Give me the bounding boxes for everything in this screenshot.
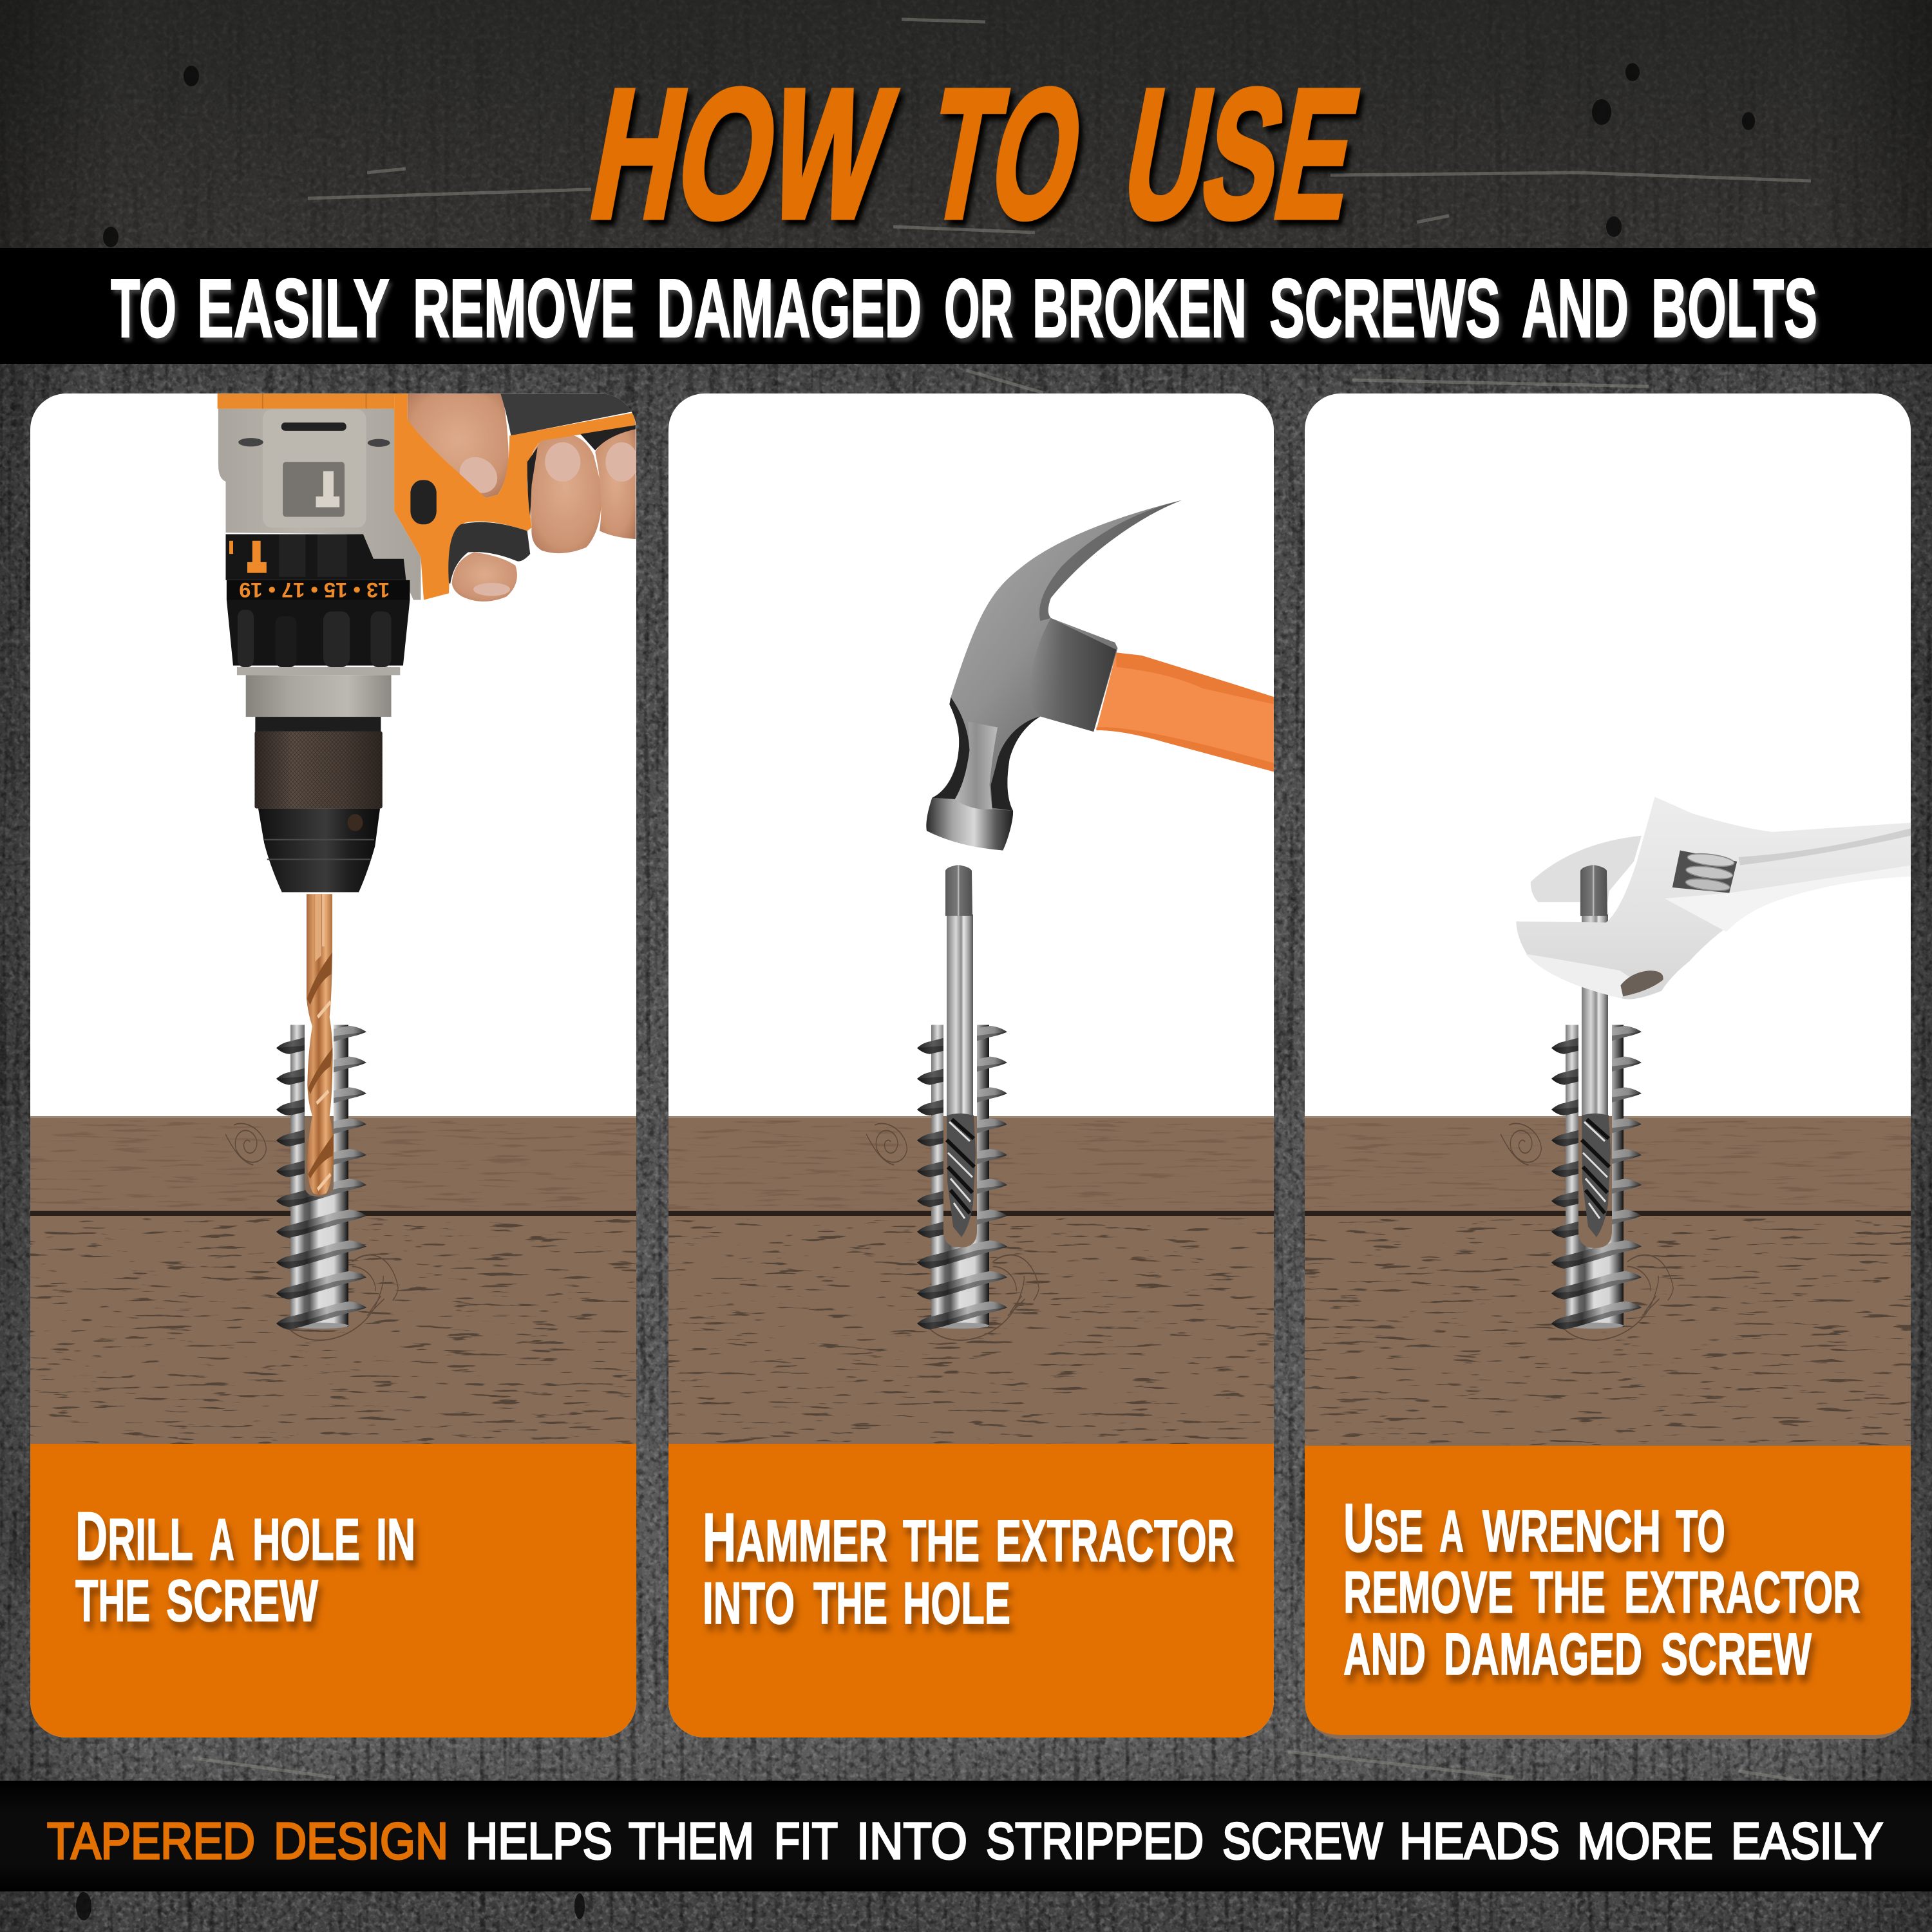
neck center [955, 722, 998, 810]
striking face [926, 798, 1013, 850]
step 3 caption: A [1439, 1499, 1464, 1564]
title: USE [1110, 51, 1372, 256]
drill and hand [218, 393, 638, 892]
subtitle text: AND [1522, 262, 1629, 355]
screw extractor [1580, 865, 1611, 1237]
drilled hole [1578, 1024, 1612, 1248]
step 2 caption: EXTRACTOR [996, 1508, 1235, 1574]
step 3 caption [1343, 1489, 1861, 1687]
panel: step 1 drill [30, 393, 638, 1740]
step 2 caption [703, 1499, 1235, 1636]
step 1 caption: SCREW [166, 1568, 318, 1634]
step 2 caption: THE [813, 1571, 887, 1636]
subtitle text: DAMAGED [657, 262, 922, 355]
wood boards [668, 1116, 1274, 1451]
bottom description text: HEADS [1399, 1812, 1560, 1870]
wood boards [30, 1116, 636, 1451]
step 3 caption: THE [1530, 1560, 1605, 1625]
bottom description text: THEM [629, 1812, 754, 1870]
knurled chuck sleeve [254, 732, 383, 808]
neck shadows [932, 697, 1040, 811]
screw in wood [1551, 1025, 1642, 1330]
wood boards [1305, 1116, 1911, 1739]
subtitle band [0, 248, 1932, 364]
chuck tip [258, 808, 380, 892]
step 2 caption box [668, 1444, 1274, 1740]
panel: step 3 wrench [1305, 393, 1911, 1739]
bottom description text: INTO [857, 1812, 967, 1870]
title [578, 51, 1372, 256]
title: HOW [578, 51, 906, 256]
bottom description text: HELPS [466, 1812, 612, 1870]
bottom description text: SCREW [1222, 1812, 1383, 1870]
bottom description text: MORE [1577, 1812, 1713, 1870]
step 3 caption box [1305, 1446, 1911, 1735]
subtitle text [111, 262, 1817, 355]
bottom description text: EASILY [1731, 1812, 1883, 1870]
subtitle text: REMOVE [413, 262, 634, 355]
wrench rear jaw [1531, 836, 1642, 902]
adjustable wrench [1516, 797, 1911, 999]
panel: step 2 hammer [668, 393, 1274, 1740]
orange housing [394, 393, 636, 600]
subtitle text: TO [111, 262, 176, 355]
hammer head [926, 500, 1182, 850]
bottom band [0, 1781, 1932, 1891]
gray gearbox body [218, 393, 421, 600]
torque number ring: 13 • 15 • 17 • 19 [239, 578, 390, 601]
black selector collar [225, 535, 406, 580]
claw shadow [1039, 500, 1182, 621]
subtitle text: OR [944, 262, 1013, 355]
bottom description text [466, 1812, 1883, 1870]
drilled hole [943, 1024, 977, 1247]
subtitle text: SCREWS [1269, 262, 1501, 355]
claw hammer [926, 500, 1274, 850]
step 3 caption: REMOVE [1343, 1560, 1513, 1625]
bottom highlight text: TAPERED [47, 1812, 255, 1870]
step 2 caption: THE [903, 1508, 980, 1574]
hand fingers [408, 393, 636, 601]
drill grip [500, 393, 635, 435]
copper drill bit [307, 894, 334, 1195]
drilled hole [305, 1024, 334, 1197]
wrench hang hole [1620, 971, 1663, 996]
step 2 caption: HOLE [903, 1571, 1010, 1636]
step 1 caption box [30, 1444, 636, 1740]
screw in wood [917, 1025, 1007, 1330]
screw extractor [945, 865, 976, 1237]
step 3 caption: WRENCH [1482, 1499, 1661, 1564]
subtitle text: BROKEN [1032, 262, 1247, 355]
step 3 caption: AND [1343, 1622, 1426, 1687]
step 1 caption: THE [75, 1568, 150, 1634]
bottom description text: STRIPPED [986, 1812, 1204, 1870]
ribbed chuck collar [227, 600, 410, 667]
step 3 caption: USE [1343, 1489, 1423, 1566]
title: TO [914, 51, 1098, 256]
step 1 caption: DRILL [75, 1497, 193, 1575]
step 3 caption: DAMAGED [1444, 1622, 1642, 1687]
step 1 caption: A [209, 1507, 234, 1573]
bottom description text: FIT [774, 1812, 838, 1870]
bottom highlight text [47, 1812, 448, 1870]
subtitle text: BOLTS [1651, 262, 1817, 355]
step 1 caption: IN [376, 1507, 415, 1573]
step 2 caption: INTO [703, 1571, 795, 1636]
subtitle text: EASILY [197, 262, 390, 355]
metal neck [237, 667, 400, 732]
side button [410, 480, 437, 524]
step 1 caption: HOLE [252, 1507, 360, 1573]
screw in wood [276, 1025, 366, 1330]
bottom highlight text: DESIGN [274, 1812, 448, 1870]
adjusting worm screw [1672, 851, 1737, 893]
step 3 caption: TO [1676, 1499, 1725, 1564]
trigger grip [448, 522, 530, 583]
step 1 caption [75, 1497, 415, 1634]
step 3 caption: SCREW [1661, 1622, 1812, 1687]
handle collar [1030, 618, 1116, 732]
step 2 caption: HAMMER [703, 1499, 887, 1576]
orange handle [1096, 652, 1274, 772]
